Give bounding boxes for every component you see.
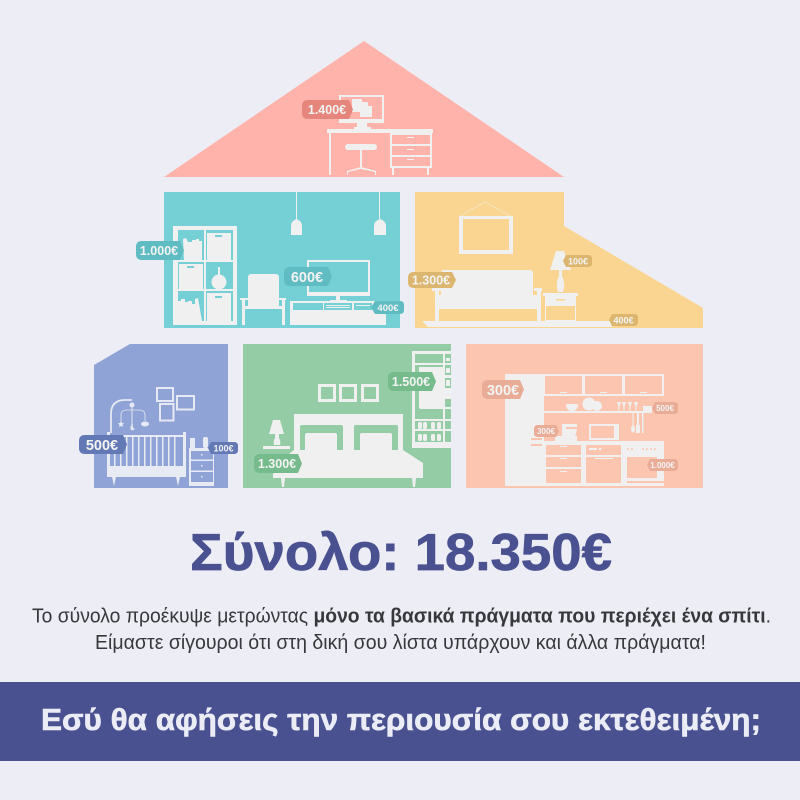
price tag: 1.000€: 1.000€ [650, 461, 675, 470]
price tag: 100€: 100€ [568, 256, 588, 266]
icon: armchair [240, 274, 286, 325]
icon: framed picture [459, 202, 513, 254]
price tag: 1.500€: 1.500€ [392, 375, 430, 389]
banner: call to action [0, 682, 800, 761]
icon: rug [422, 321, 612, 327]
price tag: 1.000€: 1.000€ [140, 244, 178, 258]
panel: nursery [79, 344, 238, 488]
panel: lounge [408, 192, 703, 328]
price tag: 400€: 400€ [613, 316, 634, 326]
price tag: 100€: 100€ [213, 444, 234, 454]
text block: explanation [32, 606, 771, 654]
price tag: 400€ [371, 301, 404, 314]
price tag: 1.000€ [136, 241, 184, 260]
icon: sofa [432, 270, 542, 321]
icon: shelf with dishes [544, 398, 652, 413]
price tag: 300€ small [534, 425, 559, 437]
price tag: 400€: 400€ [377, 303, 399, 314]
price tag: 1.400€ [302, 100, 353, 119]
price tag: 100€ [208, 442, 238, 454]
icon: wall frames [320, 386, 378, 400]
icon: wardrobe [412, 351, 451, 448]
price tag: 300€: 300€ [487, 383, 519, 399]
panel: attic office [164, 41, 564, 177]
price tag: 1.400€: 1.400€ [308, 103, 346, 117]
icon: hanging utensils [631, 413, 644, 433]
banner: call to action: Εσύ θα αφήσεις την περιουσία σου εκτεθειμένη; [41, 702, 761, 737]
price tag: 1.300€: 1.300€ [258, 457, 296, 471]
price tag: 1.300€ [408, 272, 456, 288]
icon: bedside lamp [263, 420, 290, 449]
price tag: 500€: 500€ [656, 404, 674, 413]
price tag: 600€: 600€ [291, 270, 323, 286]
icon: wall frames [157, 388, 194, 420]
icon: mixer and microwave [555, 424, 619, 441]
icon: bookshelf [173, 226, 237, 325]
panel: kitchen [466, 344, 703, 488]
price tag: 1.300€: 1.300€ [412, 274, 450, 288]
heading: total: Σύνολο: 18.350€ [190, 524, 612, 582]
price tag: 300€ [482, 380, 524, 399]
icon: wall cabinets [544, 374, 664, 396]
panel: bedroom [243, 344, 451, 488]
price tag: 500€ [652, 402, 678, 414]
price tag: 100€ [563, 255, 592, 267]
price tag: 500€ [79, 435, 127, 454]
icon: baby mobile [111, 400, 149, 433]
icon: fridge [505, 374, 544, 486]
text block: explanation: Είμαστε σίγουροι ότι στη δική σου λίστα υπάρχουν και άλλα πράγματα! [95, 632, 706, 654]
icon: nursery dresser [189, 437, 214, 486]
icon: television and console [290, 260, 386, 325]
text block: explanation: Το σύνολο προέκυψε μετρώντας μόνο τα βασικά πράγματα που περιέχει ένα σπίτι. [32, 606, 771, 628]
price tag: 500€: 500€ [86, 438, 118, 454]
icon: desk with monitor and stool [327, 95, 433, 175]
price tag: 1.000€ [647, 459, 678, 471]
icon: bed [273, 414, 423, 487]
icon: crib [107, 432, 186, 486]
price tag: 1.300€ [254, 454, 302, 473]
icon: pendant lamps [291, 192, 386, 235]
panel: living room [136, 192, 404, 328]
price tag: 300€ small: 300€ [537, 427, 555, 436]
icon: base cabinets and oven [544, 441, 664, 486]
price tag: 400€ [609, 314, 638, 326]
price tag: 600€ [284, 267, 332, 286]
price tag: 1.500€ [388, 372, 436, 391]
icon: side table with lamp [543, 251, 578, 321]
